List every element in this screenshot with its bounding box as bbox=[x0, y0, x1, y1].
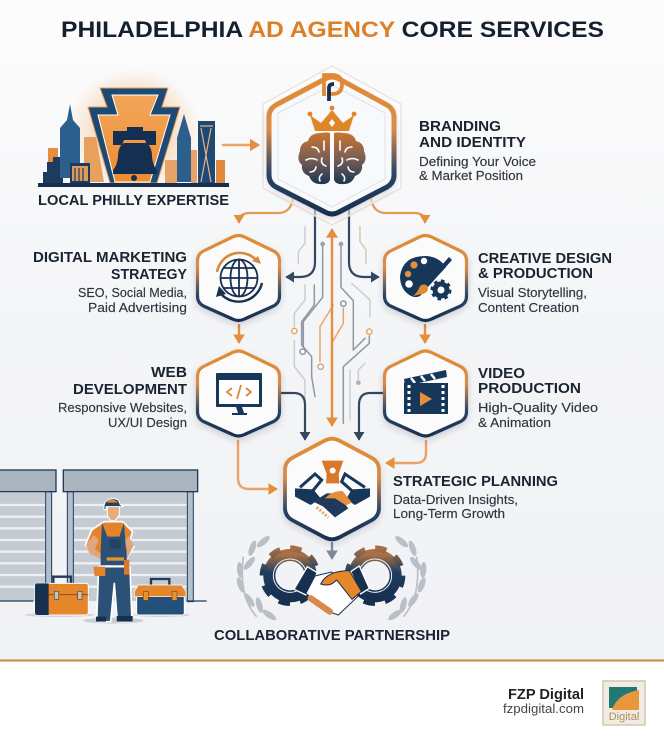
title: PHILADELPHIA AD AGENCY CORE SERVICES bbox=[61, 17, 604, 42]
text: digital marketing strategy: DIGITAL MARKETING bbox=[33, 250, 187, 266]
right roller door bbox=[63, 470, 207, 602]
connector network bbox=[223, 145, 426, 558]
partnership emblem bbox=[235, 534, 427, 622]
laurel right bbox=[387, 534, 427, 622]
text: video production: VIDEO bbox=[478, 366, 525, 382]
text: branding and identity: Defining Your Voice bbox=[419, 154, 536, 169]
arrow: branding to digital marketing bbox=[239, 198, 293, 222]
left gear bbox=[263, 548, 317, 603]
worker bbox=[85, 499, 134, 622]
arrow: navy to creative design bbox=[349, 210, 378, 277]
skyline left bbox=[43, 104, 104, 184]
text: branding and identity: BRANDING bbox=[419, 119, 501, 135]
local philly expertise emblem bbox=[38, 68, 229, 192]
text: creative design and production: CREATIVE DESIGN bbox=[478, 251, 612, 267]
arrow: local expertise to branding bbox=[223, 144, 258, 146]
hexagon: strategic planning bbox=[285, 439, 379, 539]
text: strategic planning: Long-Term Growth bbox=[393, 506, 505, 521]
footer logo bbox=[603, 681, 645, 725]
text: branding and identity bbox=[419, 119, 536, 183]
footer background bbox=[0, 660, 664, 740]
icon: P logo bbox=[324, 75, 342, 101]
glow bbox=[68, 68, 200, 192]
hexagon: video production bbox=[384, 351, 466, 436]
hexagon: digital marketing bbox=[198, 236, 280, 320]
text: video production bbox=[478, 366, 598, 430]
text: branding and identity: & Market Position bbox=[419, 168, 523, 183]
hexagon: branding and identity bbox=[263, 66, 401, 225]
icon: brain bbox=[298, 132, 366, 184]
keystone bbox=[88, 88, 180, 183]
footer brand text: FZP Digital bbox=[508, 686, 584, 703]
text: creative design and production: Content Creation bbox=[478, 300, 579, 315]
liberty bell bbox=[113, 127, 157, 181]
text: web development: Responsive Websites, bbox=[58, 400, 187, 415]
arrow: digital to web bbox=[238, 325, 240, 342]
text: strategic planning: Data-Driven Insights, bbox=[393, 492, 518, 507]
arrow: strategic to partnership bbox=[331, 543, 333, 558]
orange toolbox bbox=[35, 577, 88, 615]
right gear bbox=[348, 548, 402, 603]
icon: palette, brush and gear bbox=[400, 256, 452, 299]
text: video production: PRODUCTION bbox=[478, 381, 581, 397]
arrow: navy to digital marketing bbox=[287, 210, 315, 277]
text: video production: & Animation bbox=[478, 415, 551, 430]
text: web development bbox=[58, 365, 187, 430]
text: branding and identity: AND IDENTITY bbox=[419, 135, 526, 151]
arrow: web to strategic navy bbox=[281, 393, 305, 439]
circuit traces bbox=[292, 227, 372, 423]
hexagon: creative design bbox=[384, 236, 466, 320]
text: digital marketing strategy bbox=[33, 250, 187, 315]
icon: bridge handshake bbox=[295, 461, 370, 517]
text: strategic planning bbox=[393, 474, 558, 521]
text: web development: WEB bbox=[151, 365, 187, 381]
footer brand text bbox=[503, 686, 584, 716]
handshake bbox=[294, 566, 369, 615]
navy toolbox bbox=[134, 579, 186, 615]
hexagon: web development bbox=[198, 351, 280, 436]
skyline base bbox=[38, 183, 229, 187]
text: creative design and production bbox=[478, 251, 612, 315]
ground shadows bbox=[83, 618, 143, 624]
text: digital marketing strategy: STRATEGY bbox=[111, 267, 187, 283]
arrow: video to strategic orange bbox=[387, 441, 426, 463]
text: strategic planning: STRATEGIC PLANNING bbox=[393, 474, 558, 490]
text: video production: High-Quality Video bbox=[478, 400, 598, 415]
arrow: video to strategic navy bbox=[359, 393, 383, 439]
text: web development: DEVELOPMENT bbox=[73, 382, 187, 398]
text: creative design and production: & PRODUCTION bbox=[478, 266, 593, 282]
text: creative design and production: Visual Storytelling, bbox=[478, 285, 587, 300]
left roller door bbox=[0, 470, 56, 602]
icon: globe with arrows bbox=[216, 253, 262, 302]
icon: monitor with code bbox=[216, 373, 262, 415]
arrow: creative to video bbox=[424, 325, 426, 342]
laurel left bbox=[235, 534, 278, 622]
icon: crown bbox=[308, 106, 356, 131]
arrow: branding to creative design bbox=[371, 198, 425, 222]
footer logo: Digital bbox=[609, 711, 639, 723]
text: digital marketing strategy: SEO, Social Media, bbox=[78, 285, 187, 300]
label: collaborative partnership: COLLABORATIVE PARTNERSHIP bbox=[214, 627, 450, 644]
footer brand text: fzpdigital.com bbox=[503, 701, 584, 716]
text: web development: UX/UI Design bbox=[108, 415, 187, 430]
skyline right bbox=[165, 114, 225, 184]
arrow: web to strategic orange bbox=[238, 441, 276, 489]
arrow: central two-way bbox=[331, 230, 333, 425]
roller doors and worker illustration bbox=[0, 470, 207, 624]
footer rule bbox=[0, 660, 664, 662]
label: local philly expertise: LOCAL PHILLY EXPERTISE bbox=[38, 193, 229, 209]
icon: clapperboard bbox=[404, 370, 448, 414]
text: digital marketing strategy: Paid Advertising bbox=[88, 300, 187, 315]
